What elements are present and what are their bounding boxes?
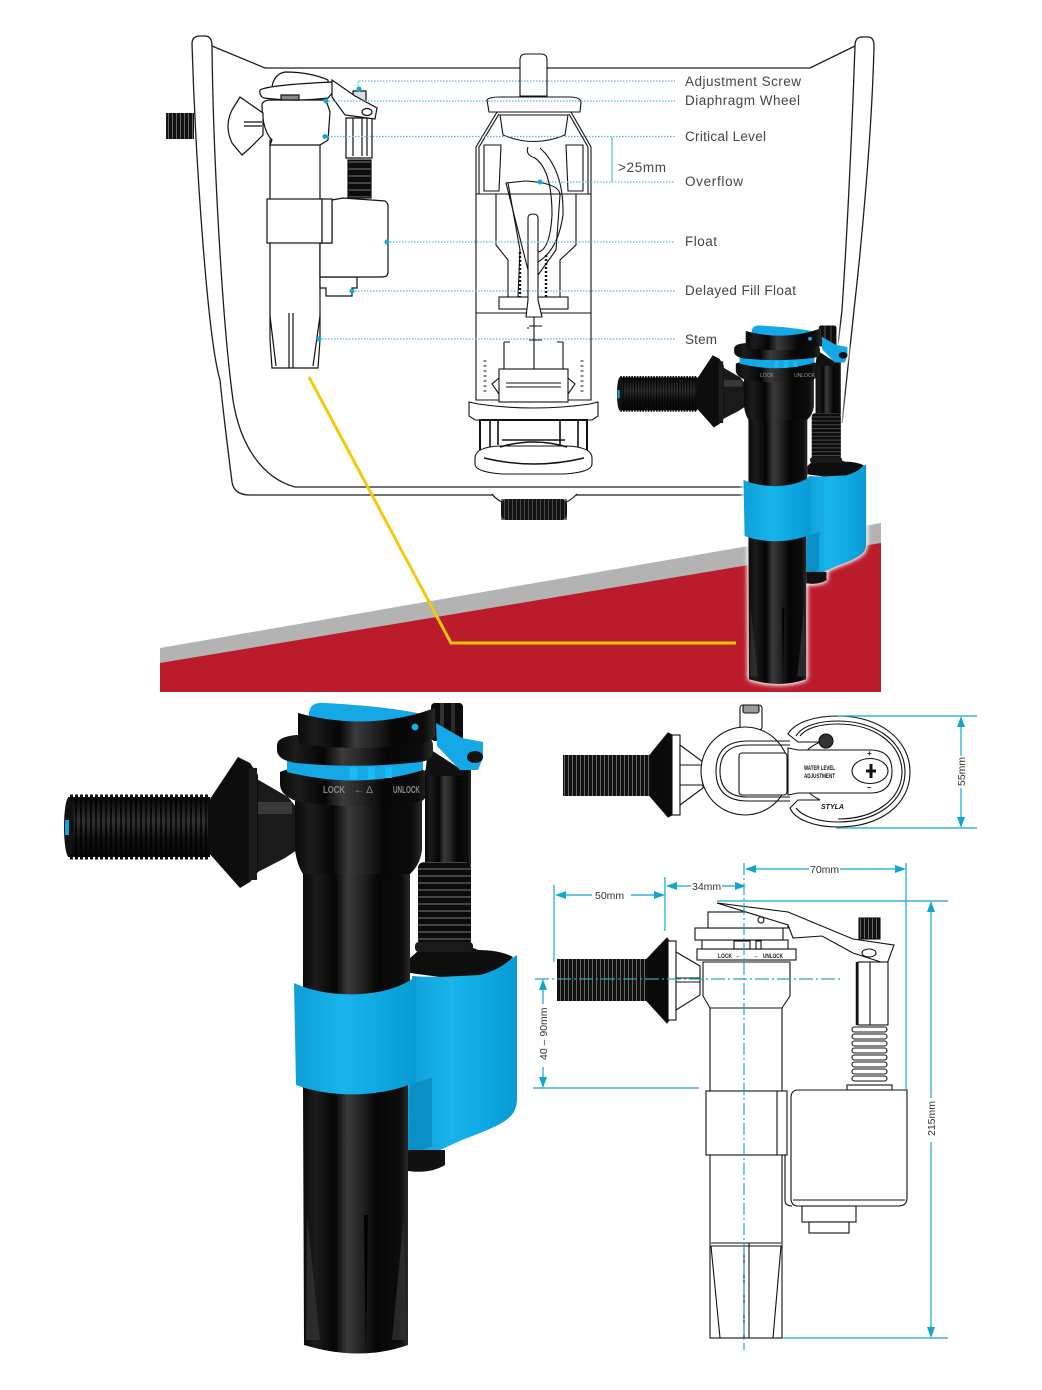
small product photo: UNLOCK [794, 373, 816, 379]
side view lock text: UNLOCK [763, 953, 783, 960]
dimension: 70mm [745, 864, 906, 876]
side view lock text: LOCK [718, 953, 732, 960]
top view small print: – [867, 783, 872, 792]
large product photo: UNLOCK [393, 785, 420, 796]
label: adjustment screw: Adjustment Screw [685, 74, 801, 89]
top view small print: WATER LEVEL [804, 766, 835, 772]
dimension: 50mm: 50mm [595, 890, 624, 902]
dimension: 40 to 90mm: 40 – 90mm [538, 1007, 550, 1060]
line drawing: fill valve in tank [228, 72, 388, 368]
label: stem: Stem [685, 332, 717, 347]
dimension: 55mm: 55mm [956, 757, 968, 786]
critical level bracket [611, 137, 613, 182]
label: critical level: Critical Level [685, 129, 766, 144]
large product photo: LOCK [323, 785, 346, 796]
dotted leader lines and dots [316, 81, 675, 342]
top view small print: STYLA [821, 804, 844, 811]
side view lock text: → [752, 953, 758, 960]
dimension: 55mm [836, 716, 977, 828]
side view lock text [718, 953, 783, 960]
small product photo: LOCK [760, 373, 774, 379]
side view line drawing [557, 903, 907, 1338]
part labels [618, 74, 801, 347]
line drawing: flush valve in tank [469, 54, 598, 505]
dimension: 70mm: 70mm [810, 864, 839, 876]
top view small print: ADJUSTMENT [804, 774, 835, 780]
label: 25mm gap: >25mm [618, 160, 666, 175]
dimension: 215mm [926, 901, 938, 1338]
toilet tank outline [192, 36, 874, 495]
large product photo [64, 703, 517, 1357]
dimension: 215mm: 215mm [926, 1101, 938, 1136]
dimension: 34mm [666, 881, 746, 893]
flush valve bottom thread [501, 499, 567, 520]
top view line drawing [563, 705, 910, 827]
large product photo: ← Δ [354, 785, 373, 796]
dimension: 40 to 90mm [538, 979, 550, 1088]
dimension: 50mm [555, 890, 665, 902]
small product photo [617, 325, 866, 686]
side view lock text: ← [735, 953, 742, 960]
top view small print: + [867, 749, 872, 758]
top view small print [804, 749, 872, 811]
side view dimensions [533, 863, 948, 1350]
dimension: 34mm: 34mm [692, 881, 721, 893]
left wall inlet thread [166, 113, 194, 139]
label: float: Float [685, 234, 717, 249]
label: delayed fill float: Delayed Fill Float [685, 283, 796, 298]
label: diaphragm wheel: Diaphragm Wheel [685, 93, 800, 108]
red floor panel with gray edge [160, 523, 881, 692]
yellow callout line [309, 377, 736, 643]
label: overflow: Overflow [685, 174, 743, 189]
